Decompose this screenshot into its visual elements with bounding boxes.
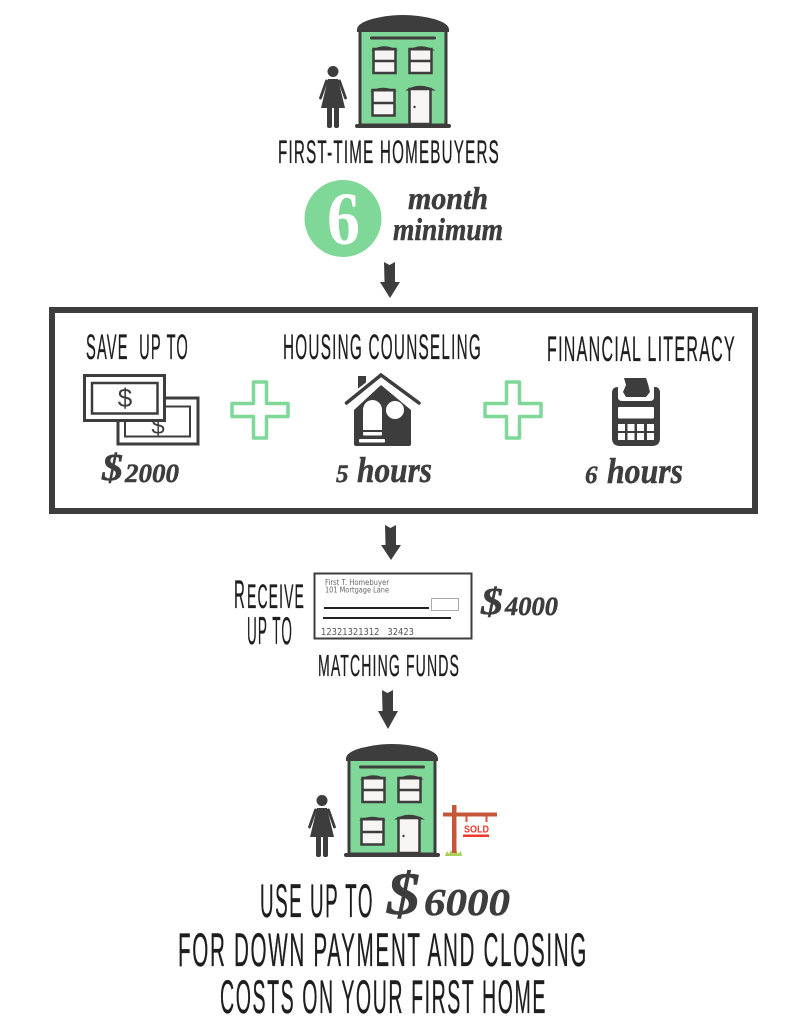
icon: plus 2 — [485, 382, 541, 438]
text: month minimum: minimum — [393, 211, 503, 247]
icon: green circle with 6: 6 — [327, 178, 360, 261]
closing text: USE UP TO — [260, 874, 374, 927]
closing text — [178, 861, 588, 1022]
icon: counseling house — [346, 375, 419, 446]
text: receive up to — [234, 573, 305, 653]
icon: sold sign — [443, 805, 497, 856]
text: ECEIVE — [247, 578, 305, 616]
text: $4000: 4000 — [504, 592, 558, 621]
panel: requirements — [52, 310, 755, 511]
icon: green circle with 6 — [304, 178, 382, 261]
panel: requirements: HOUSING COUNSELING — [283, 328, 482, 367]
icon: calculator — [612, 378, 660, 446]
icon: woman and house — [320, 15, 451, 128]
icon: money — [84, 376, 198, 444]
icon: money: $ — [151, 413, 165, 440]
icon: woman and house — [310, 744, 440, 857]
arrow 2 — [381, 525, 401, 560]
text: 5 hours: hours — [357, 450, 432, 490]
text: $2000: $ — [101, 447, 123, 489]
icon: check — [314, 574, 472, 638]
icon: woman, house and sold sign — [310, 744, 497, 857]
text: $2000 — [101, 447, 179, 489]
text: $6000: 6000 — [424, 882, 510, 924]
text: $6000: $ — [386, 861, 420, 927]
text: 5 hours: 5 — [336, 461, 348, 488]
text: MATCHING FUNDS — [318, 648, 460, 683]
icon: check: First T. Homebuyer — [325, 578, 390, 587]
text: 6 hours: 6 — [585, 462, 598, 489]
text: FIRST-TIME HOMEBUYERS — [278, 134, 500, 170]
text: 6 hours: hours — [607, 451, 683, 491]
icon: sold sign: SOLD — [464, 824, 489, 836]
icon: check: 101 Mortgage Lane — [325, 586, 389, 594]
icon: woman — [320, 66, 346, 128]
panel: requirements: SAVE UP TO — [86, 328, 189, 367]
icon: plus 1 — [232, 382, 288, 438]
text: $4000 — [480, 581, 558, 623]
text: UP TO — [247, 610, 293, 653]
text: month minimum — [393, 180, 503, 247]
icon: house — [355, 15, 451, 128]
arrow 3 — [378, 690, 398, 729]
arrow 1 — [380, 262, 400, 298]
icon: check: 12321321312 32423 — [321, 627, 414, 638]
text: $2000: 2000 — [124, 459, 179, 488]
text: $6000 — [386, 861, 510, 927]
icon: money: $ — [118, 383, 133, 413]
text: receive up to: R — [234, 573, 246, 617]
text: $4000: $ — [480, 581, 503, 623]
text: month minimum: month — [408, 180, 488, 216]
